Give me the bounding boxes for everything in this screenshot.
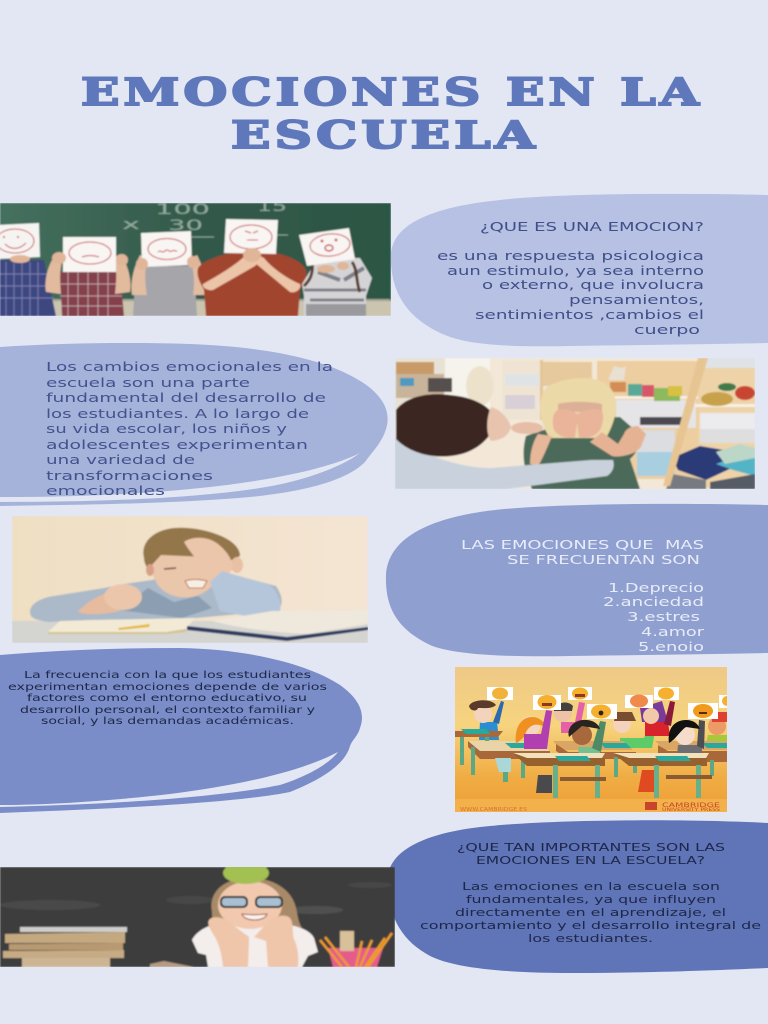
shirt	[30, 574, 282, 622]
text block: list of emotions: 3.estres	[627, 610, 700, 624]
text block: factors: factores como el entorno educativo, su	[27, 693, 307, 704]
front kids	[495, 710, 705, 793]
text block: list of emotions	[461, 538, 704, 654]
text block: importance: comportamiento y el desarrollo integral de	[420, 919, 761, 932]
hands	[10, 248, 349, 273]
text block: body: una variedad de	[46, 452, 195, 467]
photo: classroom illustration with emoji signs	[455, 667, 732, 813]
text block: body: Los cambios emocionales en la	[46, 359, 333, 374]
text block: definition: o externo, que involucra	[482, 278, 704, 292]
desks back	[455, 729, 727, 782]
text block: factors: desarrollo personal, el contexto familiar y	[20, 705, 315, 716]
text block: body: su vida escolar, los niños y	[46, 421, 288, 436]
photo: classroom illustration with emoji signs: CAMBRIDGE	[662, 802, 720, 809]
title: ESCUELA	[231, 113, 539, 157]
text block: list of emotions: LAS EMOCIONES QUE MAS	[461, 538, 704, 552]
text block: factors: experimentan emociones depende de varios	[8, 682, 327, 693]
text block: importance: los estudiantes.	[528, 932, 653, 945]
text block: body: escuela son una parte	[46, 375, 250, 390]
emoji signs	[487, 687, 732, 719]
panel: frecuencia	[0, 648, 362, 813]
text block: importance	[420, 841, 761, 945]
hair	[211, 878, 302, 930]
photo: classroom illustration with emoji signs: UNIVERSITY PRESS	[662, 807, 721, 812]
title: EMOCIONES EN LA	[81, 70, 703, 114]
blouse	[192, 924, 318, 967]
text block: body: emocionales	[46, 483, 165, 498]
text block: definition: ¿QUE ES UNA EMOCION?	[480, 220, 704, 234]
text block: body	[46, 359, 333, 498]
text block: importance: fundamentales, ya que influyen	[466, 893, 716, 906]
title	[81, 70, 703, 157]
text block: definition	[437, 220, 704, 337]
text block: importance: Las emociones en la escuela son	[462, 880, 720, 893]
photo: smiling girl with apple on her head	[0, 862, 395, 967]
text block: list of emotions: 1.Deprecio	[608, 581, 704, 595]
text block: importance: EMOCIONES EN LA ESCUELA?	[476, 854, 705, 867]
panel: emociones frecuentes	[386, 504, 768, 656]
text block: body: los estudiantes. A lo largo de	[46, 406, 309, 421]
text block: list of emotions: 5.enoio	[638, 640, 704, 654]
photo: children holding emotion face signs: 100	[155, 202, 210, 218]
text block: list of emotions: SE FRECUENTAN SON	[507, 553, 700, 567]
text block: body: fundamental del desarrollo de	[46, 390, 326, 405]
text block: factors: social, y las demandas académicas.	[41, 715, 294, 727]
panel: cambios emocionales	[0, 343, 388, 506]
text block: factors: La frecuencia con la que los estudiantes	[24, 670, 311, 681]
text block: definition: es una respuesta psicologica	[437, 249, 704, 263]
text block: list of emotions: 4.amor	[641, 625, 704, 639]
text block: importance: directamente en el aprendizaje, el	[455, 906, 726, 919]
photo: children holding emotion face signs: 15	[257, 199, 287, 215]
text block: definition: aun estimulo, ya sea interno	[447, 264, 704, 278]
text block: importance: ¿QUE TAN IMPORTANTES SON LAS	[457, 841, 725, 854]
photo: classroom illustration with emoji signs: WWW.CAMBRIDGE.ES	[460, 807, 527, 813]
panel: que es una emocion	[391, 194, 768, 346]
floor band	[455, 799, 727, 812]
panel: importancia de las emociones	[388, 820, 768, 973]
text block: definition: pensamientos,	[569, 293, 704, 307]
photo: children holding emotion face signs: x	[122, 217, 140, 233]
text block: definition: sentimientos ,cambios el	[475, 308, 704, 322]
text block: body: adolescentes experimentan	[46, 437, 308, 452]
text block: factors	[8, 670, 327, 727]
photo: teacher comforting crying child	[395, 358, 755, 489]
text block: definition: cuerpo	[634, 323, 700, 337]
arms	[208, 917, 249, 967]
text block: body: transformaciones	[46, 468, 213, 483]
hair	[142, 527, 241, 568]
photo: frustrated boy at desk	[12, 516, 368, 643]
plaid person	[0, 260, 56, 316]
photo: children holding emotion face signs: 30	[168, 218, 203, 234]
desks front	[513, 753, 712, 798]
face signs	[0, 219, 355, 272]
text block: list of emotions: 2.anciedad	[603, 595, 704, 609]
photo: children holding emotion face signs	[0, 199, 391, 316]
